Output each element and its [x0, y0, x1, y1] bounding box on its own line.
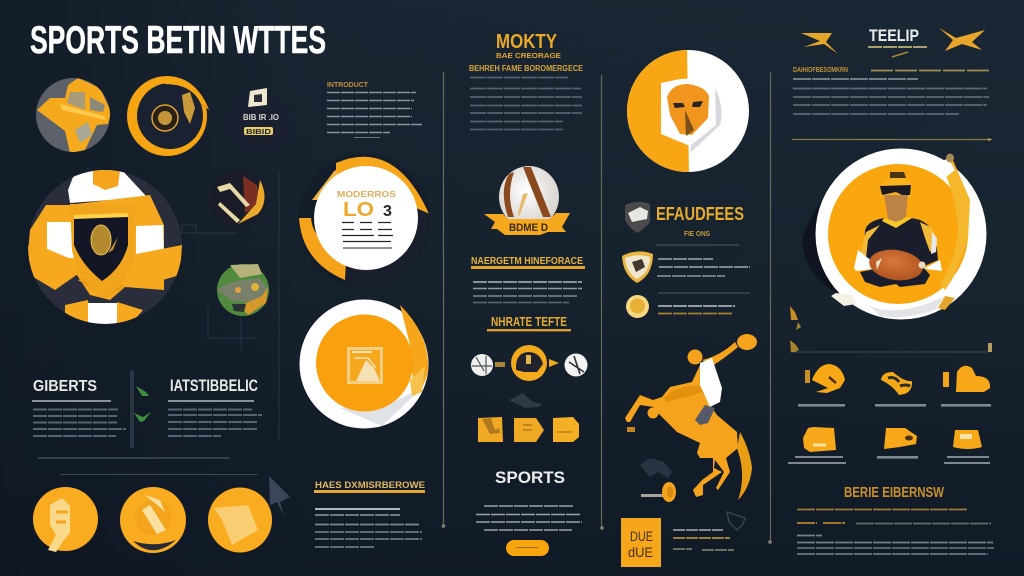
text block: [473, 282, 582, 302]
title: SPORTS BETIN WTTES: [30, 19, 326, 62]
icon: rugby ball with banner: [484, 166, 570, 235]
heading: statistics: [168, 376, 262, 436]
text block: sports: [476, 506, 582, 530]
icon: faint glove: [640, 458, 672, 478]
divider panel with leaf icons: [130, 370, 151, 448]
icon: faint gloves: [509, 393, 543, 408]
badge: yellow square: DUE: [630, 528, 653, 544]
text block: intro: INTRODUCT: [327, 82, 369, 89]
text block: intro: [327, 82, 422, 138]
pointer arrow: [269, 476, 290, 516]
circle: player with football: [802, 148, 986, 320]
heading: shield: [625, 202, 744, 245]
icon: yellow helmet badge: [36, 78, 111, 153]
player helmet and face: [880, 178, 912, 197]
heading: charts: GIBERTS: [33, 378, 97, 395]
heading: centre column: [469, 31, 584, 73]
circle: yellow donut with score: [298, 154, 430, 286]
column rules: [442, 72, 771, 543]
heading: statistics: IATSTIBBELIC: [170, 376, 258, 395]
text block: bottom centre: [314, 480, 425, 547]
jersey: [860, 218, 938, 268]
item 4: [788, 427, 846, 463]
rule with arrow: [792, 138, 993, 141]
icon row: helmet with balls: [471, 345, 588, 381]
coin 3: [208, 488, 272, 552]
heading: centre column: MOKTY: [496, 31, 558, 53]
text block: right top: DAIHIOFBESOMKRN: [793, 67, 848, 74]
text lines beside badge: [673, 530, 734, 550]
coin 2: [120, 487, 186, 553]
heading: what: [487, 314, 571, 331]
heading: bottom right: BERIE EIBERNSW: [844, 484, 945, 501]
icon: whistle: [641, 482, 676, 502]
button: [506, 540, 549, 556]
header: teelip with wings: TEELIP: [869, 27, 919, 45]
heading: what: NHRATE TEFTE: [491, 314, 567, 329]
football jersey ball: [28, 168, 182, 327]
icon: cap badge ring: [127, 76, 209, 156]
icon: faint wing: [727, 512, 745, 530]
item 1: [798, 364, 845, 407]
circle: yellow token with white rim: [300, 300, 428, 428]
circle: yellow donut with score: LO: [343, 199, 374, 221]
item 6: [944, 430, 990, 463]
heading: shield: EFAUDFEES: [656, 204, 744, 224]
heading: charts: [32, 378, 126, 436]
badge: yellow square: [621, 518, 661, 567]
icon: dark badge with label: [226, 88, 291, 155]
heading: sports: SPORTS: [495, 468, 565, 487]
icon: dark badge with label: BIBID: [246, 129, 271, 136]
circle: yellow donut with score: MODERROS: [337, 190, 397, 199]
icon: small ornaments: [790, 154, 954, 330]
heading: rule: NAERGETM HINEFORACE: [471, 255, 583, 267]
icon: rugby ball with banner: BDME D: [509, 222, 548, 234]
header: teelip with wings: [801, 27, 985, 57]
circle: yellow donut with score: 3: [383, 203, 392, 220]
icon: green globe: [217, 264, 269, 316]
item 2: [875, 372, 926, 407]
coin 1: [33, 487, 98, 552]
icon row: ticket tags: [478, 417, 579, 442]
text block: centre column: [470, 78, 582, 130]
row rule with ends: [790, 340, 992, 352]
heading: centre column: BEHREH FAME BOROMERGECE: [469, 64, 584, 73]
icon grid: six gold items: [788, 364, 991, 463]
item 5: [877, 428, 918, 459]
heading: shield: FIE ONS: [684, 231, 710, 238]
text block: bottom right: [797, 510, 994, 554]
icon: dark badge with label: BIB IR .IO: [243, 113, 279, 122]
icon: crown ball: [210, 170, 266, 228]
badge: yellow square: dUE: [628, 544, 653, 560]
icon: crest with lines: [622, 251, 750, 283]
connector lines: [180, 172, 279, 440]
heading: centre column: BAE CREORAGE: [496, 51, 561, 60]
circle: half yellow helmet: [627, 50, 749, 172]
text block: bottom centre: HAES DXMISRBEROWE: [315, 480, 425, 490]
item 3: [941, 366, 991, 407]
icon row: bottom gold coins: [33, 476, 290, 553]
icon: gold coin with lines: [626, 295, 735, 318]
illustration: horse rider: [625, 334, 757, 500]
